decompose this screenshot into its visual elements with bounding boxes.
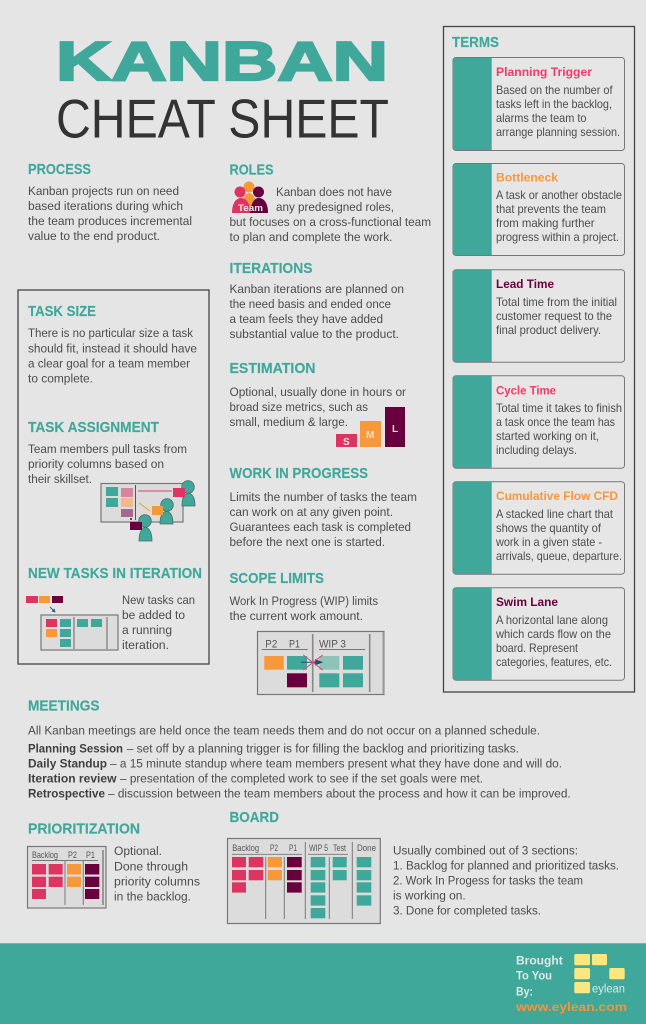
term card: cycle time: started working on it, bbox=[496, 430, 599, 443]
meeting: planning session: – set off by a planning trigger is for filling the backlog and prioritizing tasks. bbox=[127, 741, 519, 755]
section: work in progress: before the next one is started. bbox=[230, 535, 385, 549]
section: iterations: Kanban iterations are planned on bbox=[230, 282, 404, 296]
section: iterations: the need basis and ended once bbox=[230, 297, 391, 311]
section: iterations bbox=[230, 261, 404, 341]
section: prioritization: priority columns bbox=[114, 875, 200, 889]
term card: cycle time: including delays. bbox=[496, 444, 577, 457]
diagram: scope board: WIP 3 bbox=[319, 638, 346, 650]
section: task assignment: TASK ASSIGNMENT bbox=[28, 420, 159, 436]
icon: size boxes bbox=[336, 407, 405, 448]
text: board sections: 3. Done for completed tasks. bbox=[393, 904, 541, 918]
term card: cumulative flow: arrivals, queue, departure. bbox=[496, 550, 622, 563]
text: brought to you by bbox=[516, 953, 563, 999]
term card: bottleneck: A task or another obstacle bbox=[496, 189, 622, 202]
panel: tasks bbox=[18, 290, 209, 664]
term card: bottleneck: that prevents the team bbox=[496, 203, 606, 216]
term card: bottleneck: from making further bbox=[496, 217, 595, 230]
term card: bottleneck: progress within a project. bbox=[496, 231, 619, 244]
title bbox=[56, 30, 389, 150]
icon: team: Team bbox=[238, 203, 263, 214]
icon: size boxes: L bbox=[392, 424, 398, 435]
text: brought to you by: Brought bbox=[516, 953, 563, 967]
section: task size: TASK SIZE bbox=[28, 304, 96, 320]
section: process: PROCESS bbox=[28, 162, 91, 178]
text: board sections: is working on. bbox=[393, 889, 466, 903]
section: iterations: a team feels they have added bbox=[230, 312, 383, 326]
meeting: planning session: Planning Session bbox=[28, 741, 123, 755]
section: prioritization bbox=[28, 821, 200, 908]
term card: swim lane: which cards flow on the bbox=[495, 628, 611, 641]
term card: cycle time: Cycle Time bbox=[496, 384, 556, 398]
title: KANBAN bbox=[56, 30, 388, 92]
section: new tasks in iteration: be added to bbox=[122, 608, 185, 622]
meeting: retrospective: – discussion between the team members about the process and how it can be improved. bbox=[108, 786, 571, 800]
term card: planning trigger: arrange planning session. bbox=[496, 126, 620, 139]
text: board sections: 2. Work In Progess for tasks the team bbox=[393, 873, 583, 887]
text: board sections: 1. Backlog for planned and prioritized tasks. bbox=[393, 858, 619, 872]
diagram: priority board: P2 bbox=[68, 850, 77, 860]
meeting: daily standup: Daily Standup bbox=[28, 756, 107, 770]
diagram: priority board: Backlog bbox=[32, 850, 58, 860]
meeting: daily standup: – a 15 minute standup where team members present what they have done and will do. bbox=[110, 756, 562, 770]
arrow: blocked pull bbox=[301, 655, 323, 670]
section: process: value to the end product. bbox=[28, 229, 160, 243]
section: meetings: MEETINGS bbox=[28, 699, 100, 715]
section: task size: to complete. bbox=[28, 372, 93, 386]
term card: swim lane: board. Represent bbox=[496, 642, 579, 655]
term card: cumulative flow: Cumulative Flow CFD bbox=[496, 489, 618, 503]
term card: swim lane: categories, features, etc. bbox=[496, 656, 612, 669]
section: task assignment: priority columns based on bbox=[28, 457, 164, 471]
term card: bottleneck bbox=[453, 164, 624, 256]
meeting: retrospective: Retrospective bbox=[28, 786, 105, 800]
section: scope limits: the current work amount. bbox=[230, 609, 363, 623]
section: scope limits bbox=[230, 571, 384, 694]
section: task size: should fit, instead it should have bbox=[28, 342, 197, 356]
section: scope limits: SCOPE LIMITS bbox=[230, 571, 324, 587]
meeting: iteration review: – presentation of the completed work to see if the set goals were met. bbox=[120, 771, 483, 785]
section: prioritization: in the backlog. bbox=[114, 890, 191, 904]
section: iterations: ITERATIONS bbox=[230, 261, 313, 277]
section: process: the team produces incremental bbox=[28, 214, 192, 228]
term card: planning trigger: alarms the team to bbox=[496, 112, 586, 125]
diagram: scope board: P1 bbox=[289, 638, 300, 650]
section: new tasks in iteration bbox=[26, 566, 202, 652]
section: roles: Kanban does not have bbox=[276, 185, 392, 199]
section: prioritization: Optional. bbox=[114, 844, 162, 858]
section: task assignment: Team members pull tasks from bbox=[28, 442, 187, 456]
section: work in progress bbox=[230, 466, 417, 549]
link: website: www.eylean.com bbox=[515, 1000, 627, 1014]
term card: bottleneck: Bottleneck bbox=[496, 170, 558, 184]
section: new tasks in iteration: a running bbox=[122, 623, 172, 637]
meeting: iteration review: Iteration review bbox=[28, 771, 117, 785]
icon: team bbox=[232, 182, 268, 214]
section: process bbox=[28, 162, 192, 243]
logo: eylean bbox=[574, 954, 625, 996]
section: meetings: All Kanban meetings are held once the team needs them and do not occur on a planned schedule. bbox=[28, 724, 540, 738]
term card: lead time: Total time from the initial bbox=[496, 296, 617, 309]
diagram: team pulling tasks bbox=[101, 481, 195, 541]
section: estimation: ESTIMATION bbox=[230, 361, 316, 377]
term card: cumulative flow: shows the quantity of bbox=[496, 522, 602, 535]
term card: cumulative flow: work in a given state - bbox=[495, 536, 602, 549]
section: work in progress: WORK IN PROGRESS bbox=[230, 466, 368, 482]
text: brought to you by: By: bbox=[516, 985, 533, 999]
diagram: kanban board: Test bbox=[333, 843, 346, 853]
section: roles: to plan and complete the work. bbox=[230, 230, 392, 244]
section: roles: ROLES bbox=[230, 162, 274, 178]
term card: planning trigger: tasks left in the backlog, bbox=[496, 98, 612, 111]
section: process: based iterations during which bbox=[28, 199, 183, 213]
section: work in progress: can work on at any given point. bbox=[230, 505, 393, 519]
term card: cycle time bbox=[453, 376, 624, 468]
term card: lead time: Lead Time bbox=[496, 277, 554, 291]
panel: terms bbox=[444, 26, 634, 692]
section: task assignment: their skillset. bbox=[28, 472, 92, 486]
heading: terms: TERMS bbox=[452, 35, 499, 51]
text: board sections bbox=[393, 843, 619, 918]
diagram: priority board: P1 bbox=[86, 850, 95, 860]
footer bbox=[0, 943, 646, 1024]
section: new tasks in iteration: iteration. bbox=[122, 638, 169, 652]
term card: lead time bbox=[453, 270, 624, 362]
term card: cycle time: a task once the team has bbox=[496, 416, 615, 429]
term card: planning trigger: Based on the number of bbox=[496, 84, 613, 97]
section: roles bbox=[230, 162, 431, 244]
section: work in progress: Guarantees each task is completed bbox=[230, 520, 411, 534]
section: estimation: Optional, usually done in hours or bbox=[230, 385, 406, 399]
text: board sections: Usually combined out of 3 sections: bbox=[393, 843, 578, 857]
diagram: scope board: P2 bbox=[265, 638, 277, 650]
diagram: kanban board: P1 bbox=[289, 843, 297, 853]
section: scope limits: Work In Progress (WIP) limits bbox=[230, 594, 378, 608]
section: meetings bbox=[28, 699, 571, 800]
section: estimation: small, medium & large. bbox=[230, 415, 348, 429]
title: CHEAT SHEET bbox=[56, 88, 389, 150]
term card: lead time: customer request to the bbox=[496, 310, 612, 323]
text: brought to you by: To You bbox=[516, 969, 552, 983]
diagram: kanban board bbox=[228, 838, 380, 924]
diagram: kanban board: P2 bbox=[270, 843, 278, 853]
section: new tasks in iteration: New tasks can bbox=[122, 593, 195, 607]
section: task assignment bbox=[28, 420, 195, 541]
section: work in progress: Limits the number of tasks the team bbox=[230, 490, 417, 504]
section: prioritization: Done through bbox=[114, 859, 188, 873]
term card: planning trigger: Planning Trigger bbox=[496, 65, 592, 79]
term card: lead time: final product delivery. bbox=[496, 324, 601, 337]
diagram: kanban board: Backlog bbox=[232, 843, 259, 853]
term card: cumulative flow bbox=[453, 482, 624, 574]
diagram: new tasks board bbox=[26, 596, 118, 650]
section: process: Kanban projects run on need bbox=[28, 184, 179, 198]
section: estimation: broad size metrics, such as bbox=[230, 400, 368, 414]
section: board bbox=[228, 810, 619, 924]
term card: swim lane: A horizontal lane along bbox=[496, 614, 608, 627]
section: task size: a clear goal for a team member bbox=[28, 356, 190, 370]
term card: cycle time: Total time it takes to finish bbox=[496, 402, 622, 415]
diagram: kanban board: Done bbox=[357, 843, 376, 853]
term card: planning trigger bbox=[453, 58, 624, 150]
section: board: BOARD bbox=[230, 810, 279, 826]
icon: size boxes: S bbox=[343, 437, 350, 448]
section: iterations: substantial value to the product. bbox=[230, 327, 399, 341]
section: roles: any predesigned roles, bbox=[276, 200, 394, 214]
section: prioritization: PRIORITIZATION bbox=[28, 821, 140, 837]
section: task size: There is no particular size a task bbox=[28, 326, 194, 340]
section: task size bbox=[28, 304, 197, 386]
term card: swim lane bbox=[453, 588, 624, 680]
diagram: scope board bbox=[258, 632, 384, 694]
section: roles: but focuses on a cross-functional team bbox=[230, 215, 431, 229]
section: estimation bbox=[230, 361, 406, 448]
term card: cumulative flow: A stacked line chart that bbox=[496, 508, 614, 521]
diagram: kanban board: WIP 5 bbox=[309, 843, 328, 853]
icon: size boxes: M bbox=[366, 430, 374, 441]
logo: eylean: eylean bbox=[592, 984, 625, 996]
term card: swim lane: Swim Lane bbox=[496, 595, 558, 609]
section: new tasks in iteration: NEW TASKS IN ITERATION bbox=[28, 566, 202, 582]
diagram: priority board bbox=[28, 846, 106, 908]
